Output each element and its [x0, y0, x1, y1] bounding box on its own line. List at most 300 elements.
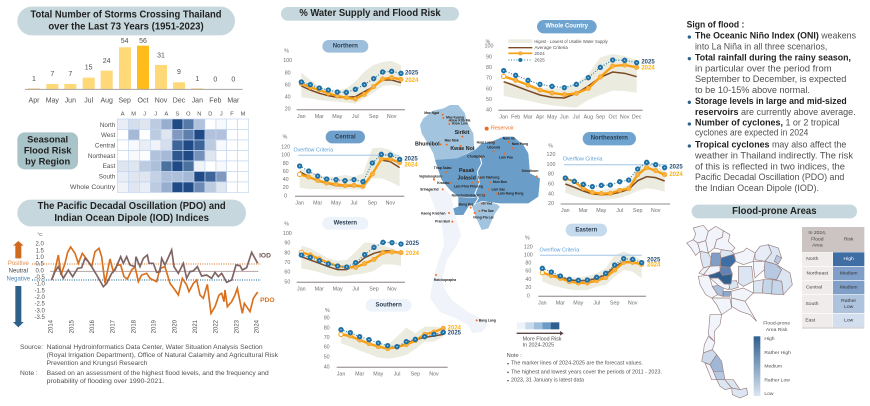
chart: Whole Country: 40	[486, 107, 492, 113]
table: risk by region: High	[844, 256, 854, 262]
label: positive neutral negative: Positive	[8, 261, 29, 267]
chart: Northern: May	[332, 114, 343, 120]
panel: storms crossing Thailand	[17, 7, 249, 192]
labels: reservoir names: Lam Takhong	[478, 175, 499, 179]
line chart: PDO and IOD	[32, 232, 275, 333]
chart: Western: Sep	[369, 287, 379, 293]
panel: flood-prone areas	[687, 205, 864, 398]
text block: source and note	[20, 344, 279, 385]
chart: Whole Country: Apr	[536, 115, 544, 121]
bar chart: storms per month: 31	[157, 52, 165, 59]
chart: Eastern: 2025	[647, 257, 661, 263]
chart: Southern: 2024	[448, 325, 462, 331]
legend: water supply lines: Higest - Lowest of Usable Water Supply	[534, 39, 608, 44]
bar chart: storms per month: 0	[213, 76, 217, 83]
chart: Northeastern: Jan	[561, 208, 570, 214]
chart: Eastern: Jan	[538, 300, 547, 306]
legend: flood-prone area risk: Area Risk	[766, 327, 788, 333]
bullet: total rainfall: to be 10-15% above normal.	[695, 85, 810, 95]
labels: reservoir names: Pra Sae	[482, 209, 494, 213]
bar chart: storms per month: Dec	[173, 97, 186, 104]
heatmap: seasonal flood risk: J	[143, 111, 146, 117]
bullet: tropical cyclones: the Indian Ocean Dipole (IOD).	[695, 183, 819, 193]
chart: Northeastern: 120	[547, 152, 555, 158]
heatmap: seasonal flood risk	[70, 111, 249, 192]
heading: Whole Country: Whole Country	[545, 24, 589, 30]
chart: Northern: Mar	[315, 114, 324, 120]
chart: Northeastern: Sep	[633, 208, 642, 214]
line chart: PDO and IOD: 2.0	[36, 242, 44, 248]
bar chart: storms per month: 56	[139, 38, 147, 45]
bar chart: storms per month: 9	[177, 69, 181, 76]
heatmap: seasonal flood risk: M	[131, 111, 136, 117]
chart: Northern	[283, 40, 419, 120]
chart: Eastern: Jul	[593, 300, 600, 306]
bar chart: storms per month: Nov	[155, 97, 168, 104]
chart: Whole Country: Jul	[573, 115, 580, 121]
labels: reservoir names: Kaeng Krachan	[421, 211, 446, 215]
table: risk by region: Central	[806, 285, 822, 291]
legend: more flood risk	[517, 322, 564, 349]
labels: reservoir names: Nam Pung	[512, 142, 528, 146]
labels: reservoir names: Naruebodindrachinta	[452, 194, 485, 198]
line chart: PDO and IOD: 2021	[193, 319, 199, 333]
bar chart: storms per month: May	[46, 97, 59, 104]
chart: Central: Nov	[386, 200, 395, 206]
bar chart: storms per month: 24	[103, 58, 111, 65]
icon: down arrow negative	[13, 286, 24, 327]
text block: source and note: Note :	[20, 370, 38, 377]
labels: reservoir names: Kwae Noi	[450, 146, 475, 152]
chart: Whole Country: Mar	[523, 115, 533, 121]
heatmap: seasonal flood risk: S	[175, 111, 179, 117]
bullet: Oceanic Nino Index	[688, 31, 856, 51]
chart: Eastern: 80	[525, 261, 531, 267]
chart: Western: 90	[284, 241, 290, 247]
map: Thailand reservoirs	[415, 105, 540, 333]
chart: Eastern: 20	[525, 285, 531, 291]
labels: reservoir names: Si Yad	[482, 202, 492, 206]
chart: Northern: %	[284, 49, 289, 55]
line chart: PDO and IOD: -0.5	[35, 275, 45, 281]
heading: seasonal flood risk by region: by Region	[25, 156, 71, 166]
bar chart: storms per month: Jun	[65, 97, 76, 104]
bullet: tropical cyclones: weather in Thailand indirectly. The risk	[694, 150, 853, 160]
heading: Southern: Southern	[376, 303, 402, 309]
bullet: total rainfall: Total rainfall during the rainy season,	[695, 52, 851, 62]
chart: Southern: 80	[324, 325, 330, 331]
chart: Central: 2024	[404, 163, 418, 169]
legend: flood-prone area risk	[754, 321, 791, 397]
chart: Central: 80	[283, 161, 289, 167]
labels: reservoir names: Huai Luang	[477, 140, 495, 144]
labels: Ratchaprapha and Bang Lang: Bang Lang	[479, 318, 496, 322]
labels: reservoir names: Lam Phra Phloeng	[454, 185, 483, 189]
legend: more flood risk: More Flood Risk	[523, 336, 562, 342]
bullet: Oceanic Nino Index: into La Niña in all three scenarios,	[695, 41, 827, 51]
bullet: number of cyclones: cyclones are expected in 2024	[695, 128, 808, 138]
heatmap: seasonal flood risk: North	[100, 122, 116, 129]
chart: Southern: 40	[324, 364, 330, 370]
text block: sign of flood	[687, 20, 856, 193]
chart: Western: 70	[284, 260, 290, 266]
chart: Eastern: Nov	[628, 300, 638, 306]
table: risk by region: Risk	[844, 236, 854, 242]
chart: Whole Country: 90	[486, 54, 492, 60]
chart: Central: 0	[284, 193, 287, 199]
chart: Whole Country: Feb	[511, 115, 520, 121]
labels: reservoir names: Mae Kuang	[446, 115, 464, 119]
line chart: PDO and IOD: 2016	[90, 319, 96, 333]
chart: Southern: 70	[324, 335, 330, 341]
heading: sign of flood: Sign of flood :	[687, 20, 744, 30]
line chart: PDO and IOD: 2022	[214, 319, 220, 333]
region: central and northeastern	[435, 137, 540, 215]
labels: reservoir names: Vajiralongkorn	[419, 174, 442, 178]
legend: flood-prone area risk: Rather Low	[764, 377, 790, 383]
chart: Southern: 60	[324, 345, 330, 351]
line chart: PDO and IOD: -2.0	[35, 295, 45, 301]
heading: total number of storms: over the Last 73 Years (1951-2023)	[48, 21, 204, 32]
table: risk by region: East	[805, 317, 816, 323]
text block: source and note: Prevention and Krungsri Research	[47, 360, 148, 367]
labels: reservoir names: Thap Salao	[434, 166, 452, 170]
heatmap: seasonal flood risk: O	[186, 111, 191, 117]
chart: Central: 120	[281, 145, 290, 151]
chart: Eastern: May	[573, 300, 584, 306]
line chart: PDO and IOD: -3.0	[35, 308, 45, 314]
chart: Northern: 80	[285, 70, 291, 76]
table: risk by region: North	[806, 256, 819, 262]
line chart: PDO and IOD: 2018	[131, 319, 137, 333]
text block: chart notes: 2023, 31 January is latest data	[511, 378, 585, 384]
heatmap: seasonal flood risk: D	[208, 111, 212, 117]
chart: Northeastern: 80	[548, 172, 554, 178]
chart: Central: 40	[283, 177, 289, 183]
heading: seasonal flood risk by region: Seasonal	[27, 134, 68, 144]
chart: Whole Country: Oct	[609, 115, 617, 121]
line chart: PDO and IOD: 2023	[234, 319, 240, 333]
label: positive neutral negative	[7, 261, 31, 282]
table: risk by region: Area	[812, 243, 823, 249]
line chart: PDO and IOD: 0.5	[36, 262, 44, 268]
labels: reservoir names: Lam Pao	[499, 156, 513, 160]
heatmap: seasonal flood risk: M	[241, 111, 246, 117]
heatmap: seasonal flood risk: A	[121, 111, 125, 117]
chart: Northeastern: 20	[548, 201, 554, 207]
heading: water supply and flood risk: % Water Supply and Flood Risk	[299, 8, 441, 19]
chart: Southern: Mar	[355, 371, 364, 377]
chart: Eastern: Sep	[610, 300, 619, 306]
line chart: PDO and IOD: 2017	[111, 319, 117, 333]
chart: Western: 50	[284, 279, 290, 285]
chart: Western: Jan	[297, 287, 306, 293]
bar chart: storms per month: 1	[195, 76, 199, 83]
chart: Whole Country: 2024	[641, 66, 655, 72]
heatmap: seasonal flood risk: South	[99, 173, 116, 180]
table: risk by region: Northeast	[807, 270, 829, 276]
labels: reservoir names: Mun Bon	[493, 180, 507, 184]
bar chart: storms per month: Apr	[29, 97, 40, 104]
chart: Whole Country	[485, 20, 655, 121]
line chart: PDO and IOD: -2.5	[35, 302, 45, 308]
heading: flood-prone areas	[692, 205, 857, 218]
bar chart: storms per month: 54	[121, 38, 129, 45]
chart: Southern: Jul	[394, 371, 400, 377]
chart: Northeastern: Nov	[651, 208, 661, 214]
region: eastern	[472, 202, 500, 230]
bar chart: storms per month: 1	[32, 76, 36, 83]
heading: PDO and IOD indices	[17, 200, 246, 226]
chart: Northern: 40	[285, 94, 291, 100]
table: risk by region: Medium	[840, 270, 858, 276]
chart: Northeastern: 60	[548, 181, 554, 187]
chart: Southern: 2025	[448, 331, 462, 337]
heading: Northeastern: Northeastern	[591, 136, 628, 142]
chart: Eastern: 120	[524, 245, 533, 251]
chart: Eastern: Mar	[556, 300, 565, 306]
labels: reservoir names: Chulaphon	[467, 155, 485, 159]
bar chart: storms per month: Mar	[227, 97, 240, 104]
bullet: tropical cyclones	[688, 140, 853, 193]
table: risk by region: South	[805, 301, 819, 307]
labels: reservoir names: Kiew Kho Ma	[450, 119, 470, 123]
chart: Central: Sep	[368, 200, 377, 206]
labels: reservoir names: Jolasid	[457, 175, 476, 181]
chart: Whole Country: 2025	[641, 59, 655, 65]
panel: PDO and IOD indices	[7, 200, 279, 385]
labels: reservoir names: Lam Sae	[491, 188, 505, 192]
chart: Northern: Sep	[369, 114, 378, 120]
chart: Western: 100	[283, 231, 292, 237]
heatmap: seasonal flood risk: Whole Country	[70, 184, 116, 191]
table: risk by region: Flood	[811, 236, 824, 242]
chart: Central: Overflow Criteria	[293, 148, 333, 154]
table: risk by region: Low	[844, 304, 854, 310]
labels: reservoir names: Lam Nang Rong	[498, 192, 523, 196]
text block: source and note: National Hydroinformatics Data Center, Water Situation Analysis Section	[47, 344, 263, 351]
chart: Central	[281, 131, 418, 206]
chart: Southern: Nov	[429, 371, 439, 377]
chart: Central: Jul	[351, 200, 357, 206]
line chart: PDO and IOD: -1.5	[35, 288, 45, 294]
bullet: total rainfall: in particular over the period from	[695, 63, 832, 73]
text block: chart notes: Note :	[507, 353, 522, 359]
heading: PDO and IOD indices: Indian Ocean Dipole (IOD) Indices	[54, 213, 209, 224]
line chart: PDO and IOD: IOD	[259, 252, 271, 259]
chart: Northeastern: Jul	[616, 208, 623, 214]
legend: flood-prone area risk: Rather High	[764, 350, 791, 356]
legend: flood-prone area risk: Medium	[764, 364, 782, 370]
heading: Whole Country	[537, 20, 597, 33]
chart: Central: Jan	[295, 200, 304, 206]
chart: Eastern: 40	[525, 277, 531, 283]
chart: Eastern: Overflow Criteria	[539, 247, 579, 253]
chart: Southern: Sep	[411, 371, 420, 377]
chart: Western: %	[284, 221, 289, 227]
labels: reservoir names: Kiew Lom	[452, 122, 468, 126]
chart: Whole Country: May	[547, 115, 557, 121]
chart: Whole Country: Nov	[620, 115, 630, 121]
labels: reservoir names: Krasiao	[437, 181, 449, 185]
chart: Northern: 100	[283, 58, 292, 64]
line chart: PDO and IOD: °C	[37, 232, 43, 238]
chart: Southern: May	[373, 371, 384, 377]
bullet: storage levels: Storage levels in large and mid-sized	[695, 96, 847, 106]
chart: Northern: 2025	[405, 70, 419, 76]
heatmap: seasonal flood risk: J	[220, 111, 223, 117]
chart: Whole Country: 100	[485, 44, 493, 50]
line chart: PDO and IOD: 0.0	[36, 268, 44, 274]
bar chart: storms per month: 0	[231, 76, 235, 83]
chart: Western: 80	[284, 250, 290, 256]
legend: flood-prone area risk: Low	[764, 391, 774, 397]
line chart: PDO and IOD: -3.5	[35, 315, 45, 321]
bullet: total rainfall	[688, 52, 851, 95]
labels: reservoir names: Bang Pra	[459, 202, 473, 206]
heading: total number of storms: Total Number of Storms Crossing Thailand	[30, 9, 222, 20]
chart: Northeastern: Overflow Criteria	[563, 156, 603, 162]
labels: Ratchaprapha and Bang Lang	[434, 274, 496, 322]
chart: Western: May	[333, 287, 343, 293]
chart: Northeastern: May	[596, 208, 607, 214]
chart: Northeastern: 2025	[669, 165, 683, 171]
chart: Eastern: 0	[527, 293, 530, 299]
chart: Southern: 50	[324, 354, 330, 360]
chart: Whole Country: 60	[486, 86, 492, 92]
bar chart: storms per month: 7	[50, 71, 54, 78]
chart: Northern: Jan	[297, 114, 306, 120]
legend: reservoir: Reservoir	[491, 126, 514, 132]
text block: source and note: Based on an assessment of the highest flood levels, and the frequency and	[47, 370, 269, 377]
legend: more flood risk: In 2024-2025	[523, 343, 554, 349]
chart: Central: 100	[281, 153, 290, 159]
bullet: storage levels	[688, 96, 856, 117]
bar chart: storms per month	[25, 38, 243, 104]
legend: water supply lines	[508, 39, 608, 62]
chart: Whole Country: 70	[486, 76, 492, 82]
chart: Central: 20	[283, 185, 289, 191]
heading: seasonal flood risk by region	[17, 132, 78, 169]
line chart: PDO and IOD: 1.5	[36, 248, 44, 254]
chart: Eastern	[524, 224, 661, 306]
chart: Northeastern: 40	[548, 191, 554, 197]
table: risk by region: Low	[844, 317, 854, 323]
chart: Whole Country: Sep	[596, 115, 605, 121]
heading: PDO and IOD indices: The Pacific Decadal Oscillation (PDO) and	[38, 201, 226, 212]
chart: Central: Mar	[313, 200, 322, 206]
chart: Northeastern: 100	[547, 162, 555, 168]
heatmap: seasonal flood risk: Northeast	[88, 153, 116, 160]
heading: water supply and flood risk	[281, 7, 459, 21]
table: risk by region: In 2024,	[808, 230, 826, 236]
labels: reservoir names: Sirikit	[455, 130, 470, 136]
bar chart: storms per month: 7	[68, 71, 72, 78]
bar chart: storms per month: Oct	[138, 97, 148, 104]
chart: Western: 2025	[406, 241, 420, 247]
labels: reservoir names	[415, 111, 538, 224]
heatmap: seasonal flood risk: J	[154, 111, 157, 117]
chart: Northeastern: %	[548, 144, 553, 150]
heatmap: seasonal flood risk: A	[164, 111, 168, 117]
chart: Western: Mar	[315, 287, 324, 293]
labels: reservoir names: Srinagarind	[420, 188, 439, 192]
chart: Northern: 20	[285, 107, 291, 113]
chart: Eastern: 60	[525, 269, 531, 275]
bullet: tropical cyclones: Pacific Decadal Oscillation (PDO) and	[695, 172, 844, 182]
legend: water supply lines: 2025	[534, 57, 545, 62]
bullet: tropical cyclones: Tropical cyclones may also affect the	[695, 140, 846, 150]
labels: reservoir names: Pasak	[459, 168, 474, 174]
bullet: Oceanic Nino Index: The Oceanic Niño Index (ONI) weakens	[695, 31, 856, 41]
chart: Central: 2025	[404, 156, 418, 162]
chart: Northeastern	[547, 132, 683, 214]
map: flood-prone provinces	[687, 225, 792, 398]
chart: Western: 2024	[406, 251, 420, 257]
heatmap: seasonal flood risk: F	[230, 111, 234, 117]
region: northern	[420, 105, 475, 162]
bar chart: storms per month: Sep	[118, 97, 131, 104]
heatmap: seasonal flood risk: West	[101, 132, 116, 139]
chart: Eastern: 2024	[647, 262, 661, 268]
labels: reservoir names: Nam Un	[503, 136, 515, 140]
labels: Ratchaprapha and Bang Lang: Ratchaprapha	[434, 278, 456, 282]
labels: reservoir names: Nong Pla Lai	[473, 216, 493, 220]
heatmap: seasonal flood risk: N	[197, 111, 201, 117]
table: risk by region: Medium	[840, 284, 858, 290]
text block: source and note: Source:	[20, 344, 43, 351]
line chart: PDO and IOD: 2014	[49, 319, 55, 333]
legend: flood-prone area risk: Flood-prone	[763, 321, 790, 327]
chart: Southern	[324, 299, 462, 377]
chart: Northeastern: 2024	[669, 172, 683, 178]
chart: Western: 60	[284, 270, 290, 276]
text block: chart notes	[507, 353, 662, 384]
chart: Whole Country: Aug	[584, 115, 593, 121]
heatmap: seasonal flood risk: East	[103, 163, 116, 170]
line chart: PDO and IOD: 2019	[152, 319, 158, 333]
legend: water supply lines: 2024	[534, 51, 545, 56]
heading: flood-prone areas: Flood-prone Areas	[732, 206, 816, 217]
heading: Eastern: Eastern	[575, 227, 598, 233]
label: positive neutral negative: Neutral	[9, 268, 28, 274]
chart: Southern: %	[325, 308, 330, 314]
bar chart: storms per month: Jan	[192, 97, 203, 104]
bar chart: storms per month: Aug	[100, 97, 113, 104]
bullet: tropical cyclones: of this is reflected in two indices, the	[695, 161, 845, 171]
chart: Northern: 2024	[405, 78, 419, 84]
legend: flood-prone area risk: High	[764, 336, 775, 342]
line chart: PDO and IOD: 1.0	[36, 255, 44, 261]
chart: Western: Jul	[352, 287, 359, 293]
chart: Whole Country: Jan	[499, 115, 508, 121]
chart: Northern: Jul	[352, 114, 359, 120]
heading: seasonal flood risk by region: Flood Risk	[24, 145, 72, 155]
bullet: storage levels: reservoirs are currently above average.	[695, 107, 856, 117]
chart: Whole Country: Jun	[560, 115, 569, 121]
chart: Whole Country: 80	[486, 65, 492, 71]
chart: Northern: 60	[285, 82, 291, 88]
labels: reservoir names: Mae Mok	[445, 138, 459, 142]
chart: Central: %	[283, 135, 288, 141]
chart: Southern: Jan	[337, 371, 345, 377]
line chart: PDO and IOD: -1.0	[35, 282, 45, 288]
chart: Southern: 90	[324, 316, 330, 322]
heading: Northern: Northern	[333, 44, 358, 50]
bar chart: storms per month: 15	[85, 64, 93, 71]
chart: Whole Country: %	[486, 40, 491, 46]
heatmap: seasonal flood risk: Central	[95, 142, 115, 149]
